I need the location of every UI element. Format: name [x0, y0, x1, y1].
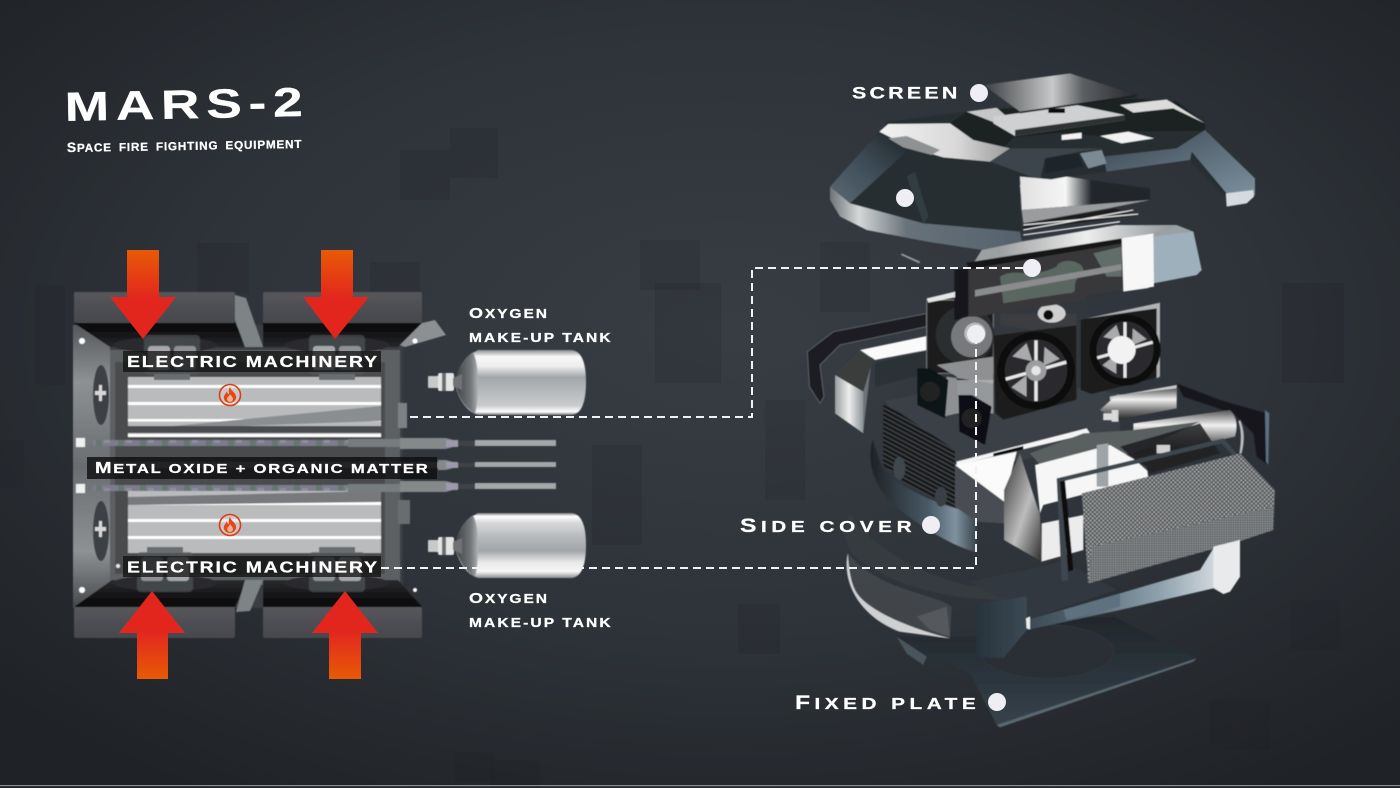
dome lid — [830, 98, 1255, 250]
lower bracket arm — [1213, 540, 1240, 594]
label: screen: SCREEN — [852, 85, 957, 103]
screen module — [983, 73, 1137, 136]
fixed plate — [897, 617, 1197, 727]
mesh cover — [1082, 453, 1275, 583]
dot: side cover — [922, 516, 940, 534]
label: oxygen top: OXYGEN — [469, 304, 547, 322]
lower hoppers — [74, 564, 422, 612]
dashed leader: top oxygen tank to device — [410, 268, 1030, 417]
arrow: bottom right — [312, 591, 378, 679]
label: metal oxide: METAL OXIDE + ORGANIC MATTER — [95, 459, 428, 476]
oxygen tank top — [428, 350, 586, 415]
central housing — [955, 420, 1244, 582]
base ring and frame — [845, 513, 1240, 658]
lower window — [128, 491, 381, 553]
camouflage duct and upper block — [901, 225, 1202, 320]
icon: flame upper — [220, 384, 240, 406]
title: MARS-2 — [64, 80, 303, 130]
arrow: top right — [303, 250, 369, 339]
icon: flame lower — [220, 514, 240, 536]
dot: duct — [1023, 259, 1041, 277]
right side panel — [1100, 383, 1269, 465]
left diagram: combustion chamber — [73, 292, 556, 638]
chamber body — [73, 325, 410, 608]
label: oxygen bottom: OXYGEN — [469, 589, 547, 607]
label: fixed plate: F IXED PLATE — [795, 692, 976, 713]
upper window — [128, 377, 381, 437]
label: oxygen top: MAKE-UP TANK — [469, 331, 611, 346]
dot: screen — [970, 84, 988, 102]
label: oxygen top — [469, 304, 611, 346]
side cover — [870, 440, 977, 552]
label: electric machinery top: ELECTRIC MACHINERY — [127, 353, 377, 371]
dashed leader: bottom oxygen tank to device — [381, 334, 976, 568]
intake trays — [74, 292, 422, 638]
electric motors — [137, 335, 365, 592]
dot: fan — [967, 325, 985, 343]
label: oxygen bottom — [469, 589, 611, 631]
oxygen tank bottom — [428, 513, 586, 578]
exploded device — [807, 73, 1275, 727]
label: oxygen bottom: MAKE-UP TANK — [469, 616, 611, 631]
internal plate — [1020, 177, 1150, 235]
upper hoppers — [74, 295, 446, 353]
fuel strip rods — [76, 438, 556, 493]
carbon panel — [883, 402, 955, 507]
arrow: bottom left — [119, 591, 185, 679]
label: side cover: S IDE COVER — [740, 515, 912, 536]
arrow: top left — [110, 250, 176, 339]
subtitle: SPACE FIRE FIGHTING EQUIPMENT — [67, 136, 302, 155]
dot: fixed plate — [988, 693, 1006, 711]
rear structure, fans and small blocks — [807, 300, 1120, 473]
dot: dome — [896, 189, 914, 207]
label: electric machinery bottom: ELECTRIC MACHINERY — [127, 558, 377, 576]
